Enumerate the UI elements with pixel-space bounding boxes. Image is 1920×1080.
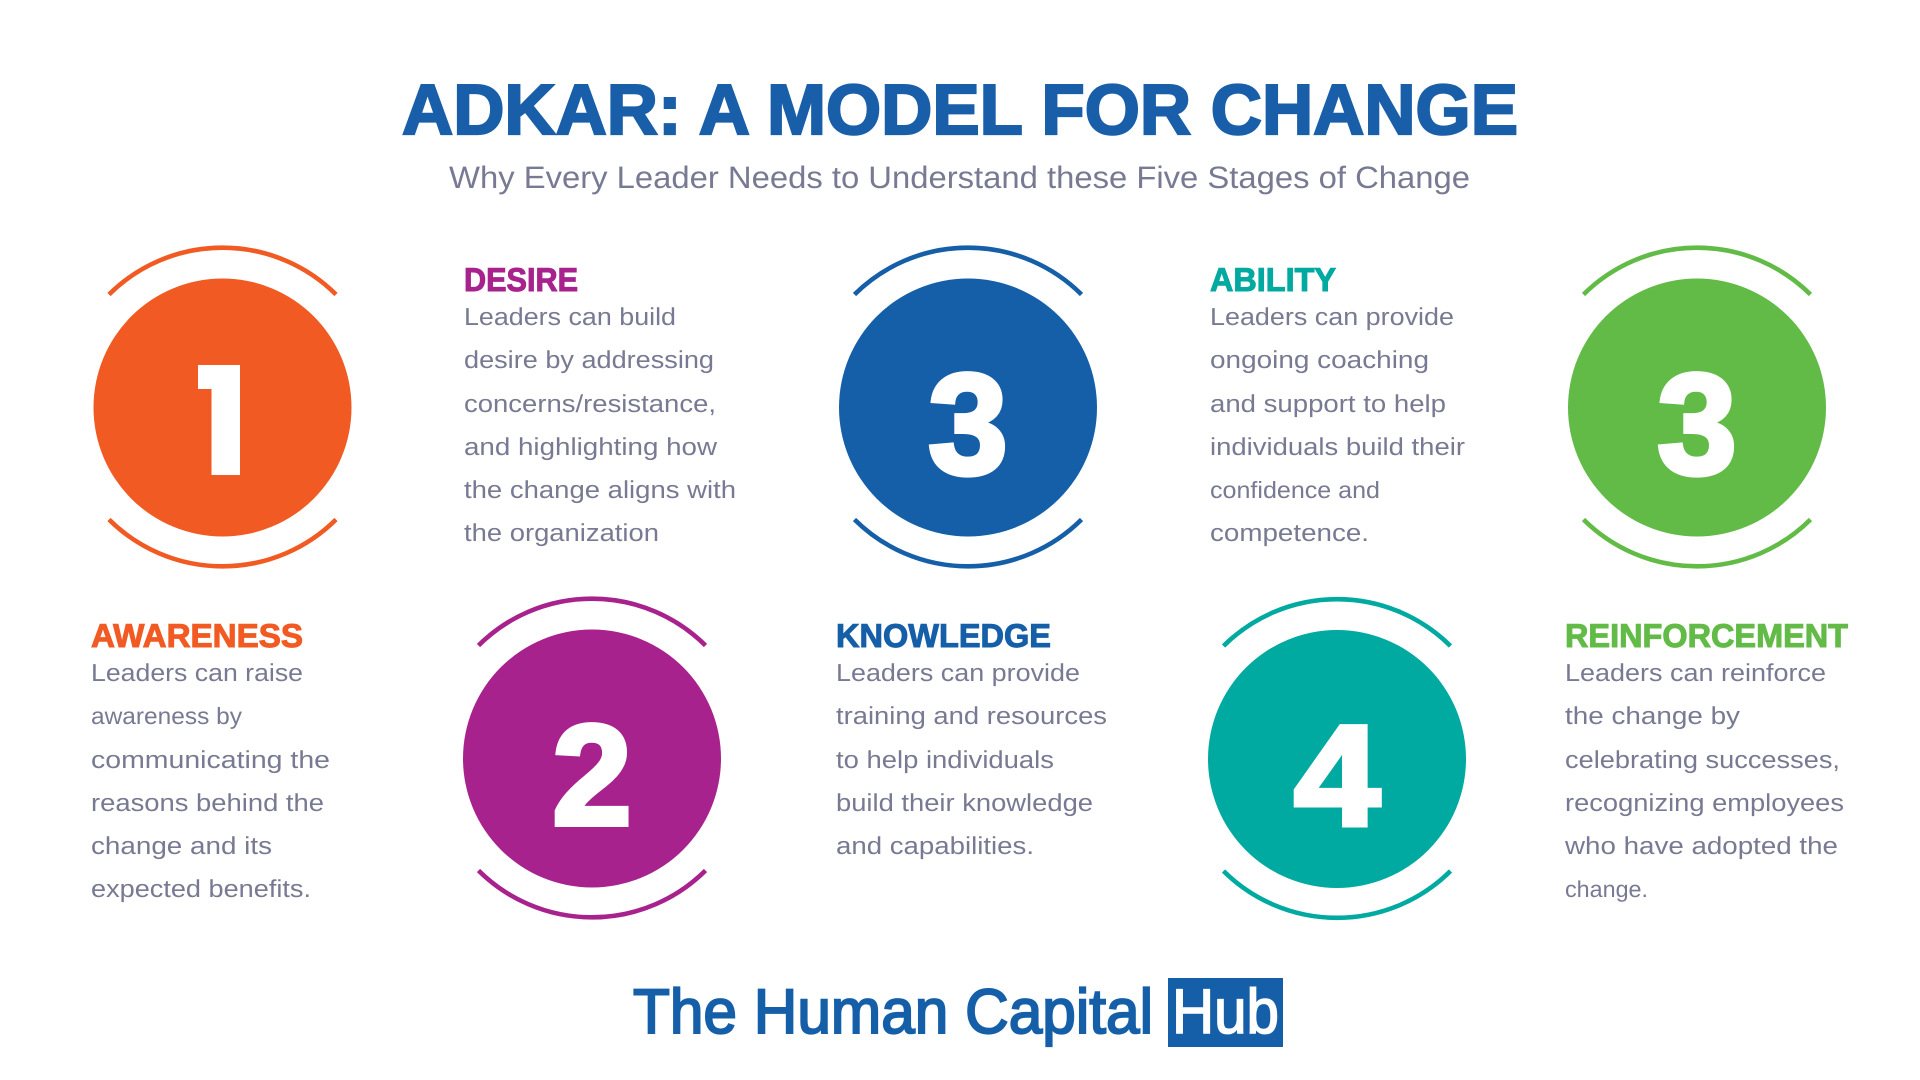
text block: awareness: Leaders can raise [91, 660, 303, 687]
text block: desire: Leaders can build [464, 304, 676, 331]
text block: knowledge: and capabilities. [836, 833, 1034, 860]
icon: number 4 circle: 4 [1294, 697, 1380, 856]
text block: desire: the change aligns with [464, 477, 736, 504]
heading: awareness: AWARENESS [91, 617, 303, 654]
text block: ability: individuals build their [1210, 434, 1465, 461]
subtitle: Why Every Leader Needs to Understand these Five Stages of Change [449, 160, 1470, 195]
text block: awareness: communicating the [91, 747, 330, 774]
icon: number 3 circle (green) [1568, 248, 1826, 566]
heading: knowledge: KNOWLEDGE [836, 617, 1051, 654]
text block: awareness [91, 660, 330, 903]
panel: ability [1210, 261, 1465, 547]
text block: reinforcement: who have adopted the [1564, 833, 1838, 860]
text block: knowledge: to help individuals [836, 747, 1054, 774]
title: ADKAR: A MODEL FOR CHANGE [402, 71, 1518, 150]
icon: number 4 circle [1208, 599, 1466, 918]
icon: number 1 circle: 1 [183, 346, 262, 504]
footer logo: The Human Capital [633, 977, 1153, 1047]
icon: number 1 circle [94, 248, 352, 566]
text block: desire: concerns/resistance, [464, 391, 716, 418]
icon: number 3 circle (green): 3 [1657, 346, 1737, 504]
text block: reinforcement [1564, 660, 1844, 902]
text block: reinforcement: Leaders can reinforce [1565, 660, 1826, 687]
icon: number 3 circle (blue): 3 [928, 346, 1008, 504]
footer logo: Hub [1172, 977, 1279, 1047]
text block: knowledge: build their knowledge [836, 790, 1093, 817]
text block: ability: confidence and [1210, 477, 1380, 503]
text block: awareness: awareness by [91, 703, 242, 729]
text block: knowledge [836, 660, 1107, 860]
heading: reinforcement: REINFORCEMENT [1565, 617, 1848, 654]
text block: awareness: expected benefits. [91, 876, 311, 903]
text block: reinforcement: recognizing employees [1565, 790, 1844, 817]
text block: awareness: change and its [91, 833, 272, 860]
heading: ability: ABILITY [1210, 261, 1336, 298]
text block: reinforcement: change. [1565, 876, 1648, 902]
text block: reinforcement: the change by [1565, 703, 1741, 730]
panel: knowledge [836, 617, 1107, 860]
text block: ability: ongoing coaching [1210, 347, 1429, 374]
text block: desire: the organization [464, 520, 659, 547]
text block: ability: and support to help [1210, 391, 1446, 418]
text block: knowledge: Leaders can provide [836, 660, 1080, 687]
icon: number 3 circle (blue) [839, 248, 1097, 566]
icon: number 2 circle: 2 [552, 696, 632, 856]
text block: ability: Leaders can provide [1210, 304, 1454, 331]
text block: ability: competence. [1210, 520, 1369, 547]
text block: ability [1210, 304, 1465, 547]
text block: desire: desire by addressing [464, 347, 714, 374]
text block: knowledge: training and resources [836, 703, 1107, 730]
panel: desire [464, 261, 736, 547]
panel: reinforcement [1564, 617, 1848, 902]
text block: desire [464, 304, 736, 547]
panel: awareness [91, 617, 330, 903]
heading: desire: DESIRE [464, 261, 578, 298]
text block: desire: and highlighting how [464, 434, 717, 461]
icon: number 2 circle [463, 599, 721, 917]
text block: awareness: reasons behind the [91, 790, 324, 817]
text block: reinforcement: celebrating successes, [1565, 747, 1840, 774]
